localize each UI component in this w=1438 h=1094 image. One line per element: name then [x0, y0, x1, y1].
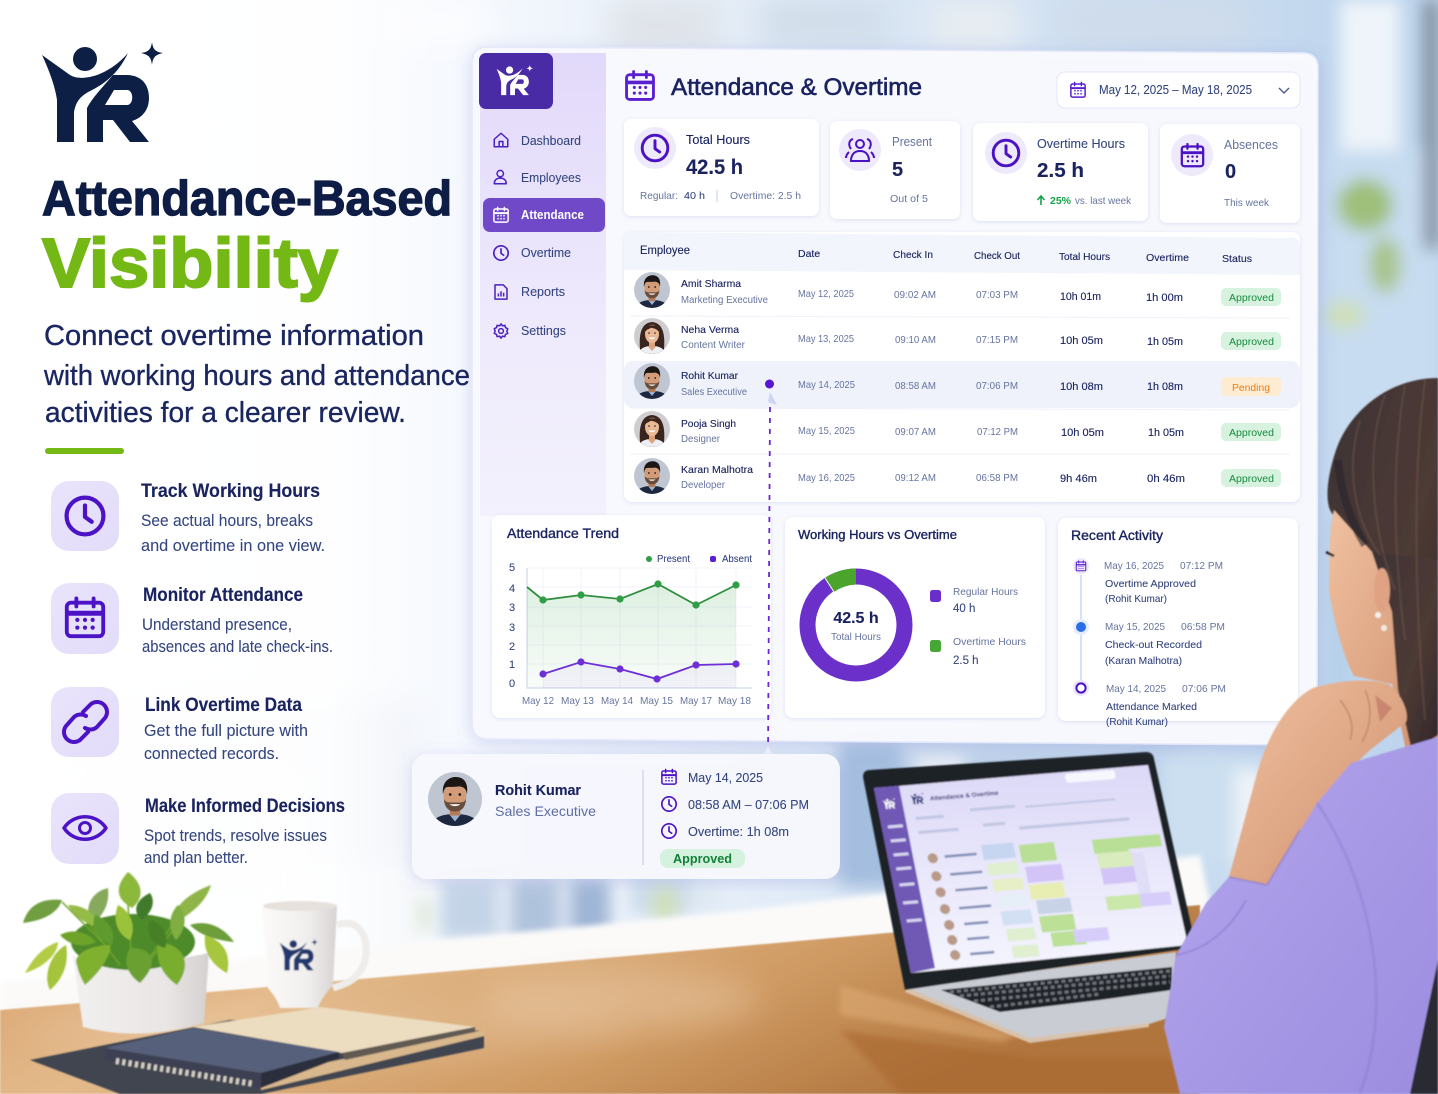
row: Pooja Singh: Approved: [1229, 427, 1274, 439]
popup: employee detail: Rohit Kumar: [495, 782, 581, 799]
face and neck: [1329, 510, 1438, 760]
stat card: Absences: This week: [1224, 197, 1270, 209]
logo: [42, 42, 163, 142]
row: Pooja Singh: May 15, 2025: [798, 425, 855, 437]
stat card: Absences: 0: [1225, 161, 1236, 183]
activity 3: May 14, 2025: [1106, 683, 1166, 695]
activity 1: (Rohit Kumar): [1105, 593, 1167, 605]
row: Amit Sharma: 09:02 AM: [894, 289, 936, 301]
row: Pooja Singh: 09:07 AM: [895, 426, 936, 438]
card: Recent Activity: [1058, 518, 1298, 728]
table header: Status: [1222, 253, 1252, 265]
stat card: Total Hours: Total Hours: [686, 133, 750, 147]
title: [42, 172, 452, 302]
nav: Dashboard: [494, 133, 581, 148]
stat card: Overtime Hours: 25%: [1050, 195, 1072, 207]
nav: Employees: [494, 170, 581, 185]
hand and forearm: [1229, 681, 1407, 887]
row: Neha Verma: 09:10 AM: [895, 334, 936, 346]
row: Rohit Kumar (highlighted): 1h 08m: [1147, 381, 1183, 393]
plant in white pot: [23, 872, 234, 1034]
chart card: Attendance Trend: [492, 515, 771, 718]
donut legend: Overtime Hours: [953, 636, 1026, 648]
y axis labels: 3: [509, 602, 515, 614]
chair: [1405, 955, 1438, 1094]
row: Karan Malhotra: Developer: [681, 479, 725, 491]
feature: Link Overtime Data: connected records.: [144, 744, 279, 763]
activity 2: Check-out Recorded: [1105, 639, 1202, 651]
title: Visibility: [42, 224, 338, 302]
area and line: present: [527, 580, 740, 688]
x axis labels: [522, 695, 751, 707]
nav: Overtime: [494, 246, 571, 260]
donut chart: [808, 568, 904, 674]
x axis labels: May 12: [522, 695, 554, 707]
nav: Employees: Employees: [521, 171, 581, 185]
popup: employee detail: 08:58 AM – 07:06 PM: [688, 797, 809, 812]
nav: Attendance (active): Attendance: [521, 208, 584, 222]
donut legend: 40 h: [953, 603, 975, 615]
y axis labels: 5: [509, 562, 515, 574]
date range selector: May 12, 2025 – May 18, 2025: [1099, 83, 1252, 97]
row: Rohit Kumar (highlighted): 10h 08m: [1060, 381, 1103, 393]
activity 2: May 15, 2025: [1105, 621, 1165, 633]
subtitle: Connect overtime information: [44, 320, 424, 352]
stat card: Absences: [1160, 124, 1300, 223]
y axis labels: 2: [509, 641, 515, 653]
activity 2: [1073, 619, 1225, 667]
icon: link: [51, 687, 119, 757]
stat card: Total Hours: Regular:: [640, 190, 678, 202]
row: Karan Malhotra: 9h 46m: [1060, 473, 1097, 485]
popup: employee detail: May 14, 2025: [688, 770, 763, 785]
row: Rohit Kumar (highlighted): Rohit Kumar: [681, 370, 738, 382]
row: Pooja Singh: 07:12 PM: [977, 426, 1018, 438]
row: Pooja Singh: [634, 411, 1281, 447]
feature: Make Informed Decisions: Make Informed Decisions: [145, 796, 345, 817]
feature: Track Working Hours: See actual hours, breaks: [141, 511, 313, 530]
icon: people: [846, 139, 874, 161]
legend: Present: [657, 554, 690, 565]
desk with window sill: [0, 855, 1250, 1094]
donut legend: Regular Hours: [953, 586, 1018, 598]
stat card: Present: Present: [892, 135, 932, 149]
subtitle: [43, 320, 470, 429]
sidebar logo tile: [479, 53, 553, 109]
subtitle: with working hours and attendance: [43, 360, 470, 392]
title: Attendance-Based: [42, 172, 452, 226]
feature: Monitor Attendance: [51, 583, 333, 656]
mug with logo: [262, 901, 366, 1008]
row: Neha Verma: May 13, 2025: [798, 333, 854, 345]
y axis labels: 3: [509, 622, 515, 634]
row: Neha Verma: Neha Verma: [681, 324, 739, 336]
nav: Dashboard: Dashboard: [521, 134, 581, 148]
row: Amit Sharma: May 12, 2025: [798, 288, 854, 300]
feature: Monitor Attendance: Monitor Attendance: [143, 585, 303, 606]
x axis labels: May 17: [680, 695, 712, 707]
feature: Make Informed Decisions: [51, 793, 345, 867]
nav: Settings: [494, 324, 566, 338]
row: Amit Sharma: Approved: [1229, 292, 1274, 304]
connector: dashed line from table row to popup: [760, 380, 777, 757]
feature: Track Working Hours: and overtime in one view.: [141, 536, 325, 555]
nav: Reports: Reports: [521, 285, 565, 299]
stat card: Overtime Hours: vs. last week: [1075, 195, 1132, 207]
row: Karan Malhotra: Karan Malhotra: [681, 464, 753, 476]
row: Rohit Kumar (highlighted): Pending: [1232, 382, 1270, 394]
activity 2: (Karan Malhotra): [1105, 655, 1182, 667]
activity 3: Attendance Marked: [1106, 701, 1197, 713]
activity 1: [1073, 558, 1223, 605]
chart card: Working Hours vs Overtime: Working Hours vs Overtime: [798, 527, 957, 542]
green accent bar: [45, 448, 124, 454]
popup: employee detail: Sales Executive: [495, 803, 596, 819]
stat card: Overtime Hours: [973, 123, 1148, 221]
table header: Date: [798, 248, 820, 260]
nav: Overtime: Overtime: [521, 246, 571, 260]
laptop: [863, 752, 1196, 1043]
row: Karan Malhotra: [634, 458, 1281, 494]
row: Amit Sharma: Marketing Executive: [681, 294, 768, 306]
x axis labels: May 14: [601, 695, 633, 707]
woman viewed from behind: [1164, 378, 1438, 1094]
table header: Employee: [640, 245, 690, 257]
row: Pooja Singh: 1h 05m: [1148, 427, 1184, 439]
row: Amit Sharma: 07:03 PM: [976, 289, 1018, 301]
stat card: Present: Out of 5: [890, 193, 928, 205]
feature: Monitor Attendance: absences and late check-ins.: [142, 637, 333, 656]
donut chart: 42.5 h: [833, 610, 879, 627]
stat card: Total Hours: Overtime: 2.5 h: [730, 190, 801, 202]
stat card: Present: 5: [892, 159, 903, 181]
icon: eye: [51, 793, 119, 864]
popup: employee detail: [412, 754, 840, 879]
feature: Link Overtime Data: [51, 687, 308, 763]
stat card: Present: [830, 121, 960, 219]
popup: employee detail: Approved: [673, 851, 732, 866]
stat card: Total Hours: [624, 119, 819, 216]
feature: Monitor Attendance: Understand presence,: [142, 615, 292, 634]
feature: Track Working Hours: [51, 481, 325, 555]
nav: Reports: [495, 285, 565, 299]
x axis labels: May 18: [718, 695, 751, 707]
x axis labels: May 13: [561, 695, 594, 707]
sidebar: [479, 53, 606, 516]
legend: [646, 554, 752, 565]
nav: Settings: Settings: [521, 324, 566, 338]
popup: employee detail: Overtime: 1h 08m: [688, 824, 789, 839]
row: Pooja Singh: Designer: [681, 433, 720, 445]
feature: Link Overtime Data: Link Overtime Data: [145, 695, 302, 716]
donut chart: Total Hours: [831, 631, 881, 643]
activity 1: 07:12 PM: [1180, 560, 1223, 572]
row: Rohit Kumar (highlighted): May 14, 2025: [798, 379, 855, 391]
table header: Check In: [893, 249, 933, 261]
row: Rohit Kumar (highlighted): [634, 363, 1281, 399]
row: Karan Malhotra: Approved: [1229, 473, 1274, 485]
feature: Make Informed Decisions: and plan better.: [144, 848, 248, 867]
row: Neha Verma: 07:15 PM: [976, 334, 1018, 346]
y axis labels: [509, 562, 515, 690]
stat card: Overtime Hours: 2.5 h: [1037, 160, 1084, 182]
row: Rohit Kumar (highlighted): Sales Executive: [681, 386, 747, 398]
attendance table: [624, 232, 1300, 502]
stat card: Overtime Hours: Overtime Hours: [1037, 137, 1125, 151]
feature: Make Informed Decisions: Spot trends, resolve issues: [144, 826, 327, 845]
row: Neha Verma: 10h 05m: [1060, 335, 1103, 347]
row: Neha Verma: [634, 318, 1281, 354]
feature: Link Overtime Data: Get the full picture with: [144, 721, 308, 740]
row: Neha Verma: Content Writer: [681, 339, 745, 351]
row: Karan Malhotra: May 16, 2025: [798, 472, 855, 484]
row: Amit Sharma: [634, 272, 1281, 308]
row: Neha Verma: Approved: [1229, 336, 1274, 348]
row: Neha Verma: 1h 05m: [1147, 336, 1183, 348]
activity 3: (Rohit Kumar): [1106, 716, 1168, 728]
table header: [640, 245, 1252, 265]
chart card: Working Hours vs Overtime: [785, 517, 1045, 718]
y axis labels: 0: [509, 678, 515, 690]
row: Rohit Kumar (highlighted): 07:06 PM: [976, 380, 1018, 392]
donut legend: [930, 586, 1026, 667]
nav: Attendance (active): [483, 198, 605, 232]
legend: Absent: [722, 554, 752, 565]
dashboard panel: [472, 47, 1318, 745]
chart card: Attendance Trend: Attendance Trend: [507, 526, 619, 541]
notebook stack: [30, 1007, 484, 1094]
date range selector: [1057, 72, 1300, 108]
row: Amit Sharma: Amit Sharma: [681, 278, 741, 290]
row: Karan Malhotra: 0h 46m: [1147, 473, 1185, 485]
table header: Total Hours: [1059, 251, 1110, 263]
card: Recent Activity: Recent Activity: [1071, 528, 1163, 543]
y axis labels: 1: [509, 659, 515, 671]
activity 3: 07:06 PM: [1182, 683, 1226, 695]
row: Rohit Kumar (highlighted): 08:58 AM: [895, 380, 936, 392]
row: Amit Sharma: 1h 00m: [1146, 292, 1183, 304]
stat card: Total Hours: 42.5 h: [686, 156, 743, 179]
row: Amit Sharma: 10h 01m: [1060, 291, 1101, 303]
table header: Overtime: [1146, 252, 1189, 264]
subtitle: activities for a clearer review.: [45, 397, 406, 429]
feature: Track Working Hours: Track Working Hours: [141, 481, 320, 502]
header: Attendance & Overtime: [671, 74, 922, 101]
icon: calendar: [51, 583, 119, 654]
table header: Check Out: [974, 250, 1020, 262]
activity 1: May 16, 2025: [1104, 560, 1164, 572]
row: Pooja Singh: 10h 05m: [1061, 427, 1104, 439]
stat card: Absences: Absences: [1224, 138, 1278, 152]
hair back: [1328, 378, 1438, 756]
activity 2: 06:58 PM: [1181, 621, 1225, 633]
row: Karan Malhotra: 09:12 AM: [895, 472, 936, 484]
y axis labels: 4: [509, 583, 515, 595]
area and line: absent: [539, 658, 740, 688]
row: Karan Malhotra: 06:58 PM: [976, 472, 1018, 484]
activity 1: Overtime Approved: [1105, 578, 1196, 590]
row: Pooja Singh: Pooja Singh: [681, 418, 736, 430]
activity 3: [1073, 680, 1226, 728]
sweater: [1164, 737, 1438, 1094]
icon: clock: [51, 481, 119, 551]
donut legend: 2.5 h: [953, 655, 979, 667]
laptop screen contents: Attendance & Overtime: [929, 790, 1000, 803]
laptop screen contents: [880, 767, 1182, 966]
stat card: Total Hours: 40 h: [684, 190, 705, 202]
x axis labels: May 15: [640, 695, 673, 707]
